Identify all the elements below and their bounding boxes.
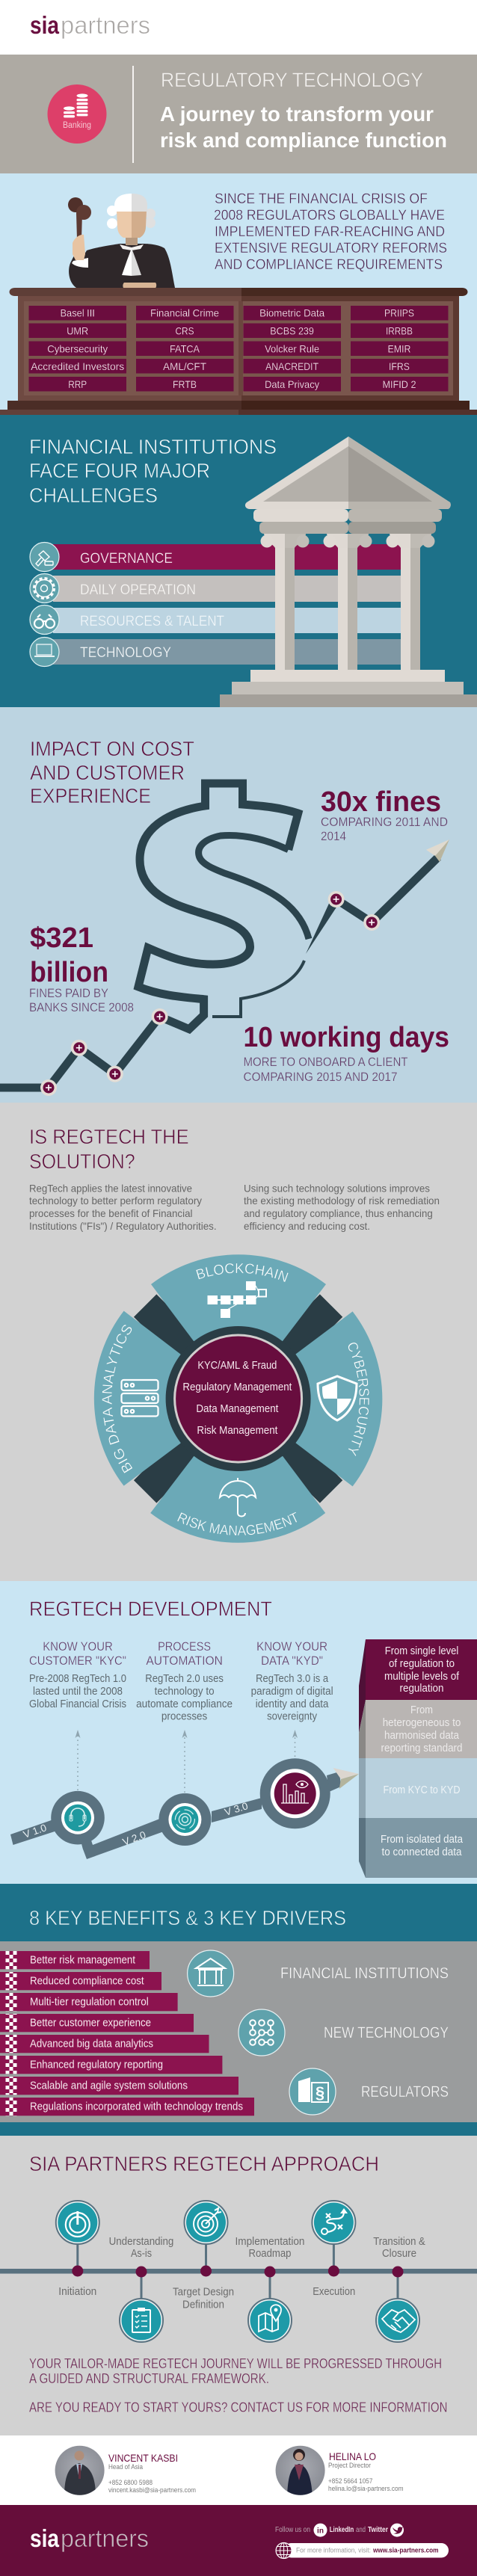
panel: shift stack: [359, 1639, 477, 1878]
chart: regulation table: AML/CFT: [163, 360, 206, 372]
segment: risk management: RISK MANAGEMENT: [177, 1512, 298, 1535]
column: right: [386, 534, 435, 670]
panel: contacts: [55, 2446, 403, 2495]
text block: regulatory reforms: AND COMPLIANCE REQUIREMENTS: [215, 256, 443, 273]
chart: regulation table: Basel III: [60, 306, 95, 318]
bar: resources and talent: RESOURCES & TALENT: [80, 614, 224, 629]
callout: 10 working days: 10 working days: [244, 1022, 449, 1053]
callout: 10 working days: COMPARING 2015 AND 2017: [244, 1070, 398, 1084]
chart: benefit bars: Better risk management: [30, 1954, 136, 1967]
heading: is regtech: SOLUTION?: [29, 1150, 135, 1173]
milestone: v1 headset: [51, 1791, 105, 1845]
text block: wheel centre: KYC/AML & Fraud: [197, 1360, 277, 1372]
heading: regulatory technology: REGULATORY TECHNOLOGY: [161, 69, 423, 91]
step: implementation roadmap: [235, 2235, 305, 2342]
chart: approach timeline: [0, 2201, 477, 2342]
callout: 10 working days: MORE TO ONBOARD A CLIENT: [244, 1055, 408, 1069]
callout: 10 working days: [244, 1022, 449, 1084]
text block: helina lo: HELINA LO: [329, 2450, 376, 2462]
block: regulation levels: multiple levels of: [384, 1670, 460, 1683]
text block: regtech benefits: the existing methodology of risk remediation: [244, 1195, 440, 1207]
chart: regulation table: BCBS 239: [270, 325, 314, 337]
driver: financial institutions: FINANCIAL INSTITUTIONS: [280, 1965, 449, 1982]
text block: know your data: RegTech 3.0 is a: [256, 1672, 329, 1685]
heading: key benefits: 8 KEY BENEFITS & 3 KEY DRIVERS: [29, 1906, 346, 1929]
social links: and: [356, 2526, 366, 2534]
icon: gavel circle: [30, 543, 59, 571]
chart: regulation table: [28, 306, 449, 392]
heading: challenges: FINANCIAL INSTITUTIONS: [29, 435, 277, 458]
footer logo: sia: [30, 2524, 60, 2552]
block: regulation levels: From single level: [385, 1645, 458, 1657]
text block: process automation: PROCESS: [158, 1639, 211, 1654]
panel: header logo: sia: [30, 11, 60, 39]
chart: regulation table: PRIIPS: [384, 306, 414, 318]
driver: regulators: §: [316, 2083, 324, 2102]
segment: blockchain: [151, 1254, 326, 1341]
icon: judge with gavel: [68, 194, 175, 288]
step: initiation: Initiation: [58, 2285, 96, 2298]
bar: daily operation: DAILY OPERATION: [80, 582, 196, 598]
text block: helina lo: +852 5664 1057: [328, 2477, 372, 2486]
icon: binoculars circle: [30, 606, 59, 634]
segment: cybersecurity: [296, 1311, 383, 1486]
chart: regtech wheel: [94, 1254, 383, 1543]
milestone: v2 automation: [159, 1793, 211, 1846]
block: kyc to kyd: From KYC to KYD: [383, 1784, 461, 1796]
text block: wheel centre: Data Management: [196, 1403, 278, 1415]
step: target design definition: Target Design: [173, 2286, 234, 2298]
chart: benefit bars: Enhanced regulatory reporting: [30, 2059, 163, 2071]
text block: regtech benefits: and regulatory compliance, thus enhancing: [244, 1207, 433, 1219]
text block: vincent kasbi: vincent.kasbi@sia-partners.com: [108, 2486, 196, 2495]
text block: know your data: DATA "KYD": [261, 1654, 323, 1668]
heading: is regtech: IS REGTECH THE: [29, 1125, 189, 1148]
callout: 321 billion: FINES PAID BY: [29, 987, 108, 1000]
segment: risk management: [150, 1456, 326, 1543]
social links: Twitter: [368, 2526, 388, 2534]
text block: know your customer: Global Financial Crisis: [29, 1698, 126, 1710]
title: a journey to transform: [160, 102, 447, 152]
step: execution: Execution: [313, 2285, 355, 2298]
text block: regtech definition: processes for the benefit of Financial: [29, 1207, 193, 1219]
icon: temple: [220, 437, 477, 707]
panel: key benefits and drivers: [0, 1884, 477, 2136]
chart: regulation table: IRRBB: [386, 325, 413, 337]
text block: vincent kasbi: [108, 2452, 196, 2495]
bar: governance: [53, 544, 401, 570]
step: target design definition: [173, 2201, 234, 2311]
chart: benefit bars: Scalable and agile system solutions: [30, 2080, 188, 2092]
chart: regulation table: EMIR: [387, 343, 411, 355]
text block: regtech benefits: Using such technology solutions improves: [244, 1183, 430, 1195]
text block: vincent kasbi: Head of Asia: [108, 2463, 144, 2471]
block: connected data: [366, 1818, 477, 1878]
callout: 30x fines: [321, 786, 448, 843]
text block: regulatory reforms: 2008 REGULATORS GLOBALLY HAVE: [214, 207, 445, 224]
step: implementation roadmap: Roadmap: [248, 2247, 292, 2260]
bar: governance: GOVERNANCE: [80, 551, 173, 567]
arrowhead: [333, 1768, 359, 1789]
heading: impact: AND CUSTOMER: [30, 761, 185, 784]
panel: impact on cost: [0, 707, 477, 1103]
chart: version road: [10, 1758, 359, 1859]
text block: regulatory reforms: SINCE THE FINANCIAL CRISIS OF: [215, 191, 428, 207]
text block: call to action: [29, 2356, 447, 2415]
chart: benefit bars: Better customer experience: [30, 2017, 151, 2030]
heading: impact: IMPACT ON COST: [30, 737, 194, 760]
heading: impact: [30, 737, 194, 807]
text block: know your data: KNOW YOUR: [256, 1639, 327, 1654]
heading: challenges: FACE FOUR MAJOR: [29, 459, 210, 482]
text block: wheel centre: [182, 1360, 292, 1437]
chart: benefit bars: Advanced big data analytics: [30, 2038, 153, 2050]
text block: know your customer: [29, 1639, 126, 1710]
title: a journey to transform: A journey to transform your: [160, 102, 434, 126]
callout: 321 billion: $321: [30, 922, 93, 954]
chart: regulation table: Biometric Data: [259, 306, 324, 318]
heading: impact: EXPERIENCE: [30, 784, 151, 807]
text block: know your data: paradigm of digital: [251, 1685, 333, 1698]
step: understanding as-is: [109, 2235, 173, 2342]
text block: know your data: sovereignty: [267, 1710, 318, 1723]
text block: regtech benefits: [244, 1183, 440, 1232]
website pill: [276, 2543, 449, 2558]
website pill: For more information, visit:: [296, 2546, 371, 2555]
text block: regtech benefits: efficiency and reducing cost.: [244, 1220, 370, 1232]
label: v2.0: V 2.0: [121, 1829, 147, 1848]
social links: in: [317, 2527, 324, 2536]
block: connected data: to connected data: [381, 1846, 462, 1858]
panel: four major challenges: [0, 415, 477, 707]
bar: technology: TECHNOLOGY: [80, 645, 171, 661]
block: data reporting: heterogeneous to: [383, 1716, 461, 1729]
callout: 30x fines: COMPARING 2011 AND: [321, 816, 448, 829]
text block: helina lo: [328, 2450, 404, 2493]
label: v3.0: V 3.0: [223, 1800, 249, 1818]
chart: regulation table: ANACREDIT: [265, 360, 318, 372]
chart: regulation table: Data Privacy: [265, 378, 319, 390]
chart: regulation table: CRS: [175, 325, 194, 337]
step: transition and closure: Transition &: [373, 2235, 425, 2248]
driver: regulators: [289, 2068, 449, 2115]
arrows: dotted upward: [75, 1730, 298, 1793]
heading: is regtech: [29, 1125, 189, 1173]
callout: 321 billion: billion: [30, 957, 108, 988]
text block: wheel centre: Regulatory Management: [182, 1381, 292, 1393]
block: regulation levels: [366, 1639, 477, 1700]
step: initiation: [56, 2201, 99, 2298]
panel: header logo: partners: [61, 11, 150, 39]
text block: regtech definition: RegTech applies the latest innovative: [29, 1183, 192, 1195]
panel: title banner: [0, 55, 477, 173]
chart: regulation table: Cybersecurity: [47, 343, 108, 355]
text block: vincent kasbi: +852 6800 5988: [108, 2479, 153, 2487]
text block: know your customer: CUSTOMER "KYC": [29, 1654, 126, 1668]
step: understanding as-is: Understanding: [109, 2235, 173, 2248]
photo: vincent kasbi: [55, 2446, 105, 2495]
text block: call to action: A GUIDED AND STRUCTURAL FRAMEWORK.: [29, 2371, 269, 2386]
social links: [275, 2524, 404, 2537]
heading: challenges: CHALLENGES: [29, 484, 158, 507]
bar: resources and talent: [53, 608, 401, 633]
block: regulation levels: of regulation to: [389, 1657, 455, 1670]
heading: regtech development: REGTECH DEVELOPMENT: [29, 1597, 272, 1621]
text block: process automation: technology to: [155, 1685, 215, 1698]
panel: footer: [0, 2505, 477, 2576]
title: a journey to transform: risk and compliance function: [160, 129, 447, 152]
icon: banking badge: Banking: [63, 121, 91, 130]
text block: regulatory reforms: [214, 191, 447, 273]
text block: helina lo: helina.lo@sia-partners.com: [328, 2485, 404, 2493]
text block: know your customer: Pre-2008 RegTech 1.0: [29, 1672, 126, 1685]
driver: new technology: NEW TECHNOLOGY: [324, 2024, 449, 2042]
panel: is regtech the solution: [0, 1103, 477, 1581]
text block: regtech definition: technology to better perform regulatory: [29, 1195, 202, 1207]
driver: new technology: [238, 2009, 449, 2056]
panel: regtech development: [0, 1581, 477, 1884]
segment: big data analytics: BIG DATA ANALYTICS: [102, 1325, 133, 1473]
text block: process automation: processes: [161, 1710, 207, 1723]
text block: process automation: RegTech 2.0 uses: [145, 1672, 224, 1685]
step: transition and closure: Closure: [382, 2247, 416, 2260]
chart: benefit bars: [0, 1951, 254, 2116]
text block: helina lo: Project Director: [328, 2462, 371, 2470]
chart: regulation table: IFRS: [389, 360, 410, 372]
chart: regulation table: Volcker Rule: [265, 343, 319, 355]
heading: challenges: [29, 435, 277, 507]
bar: daily operation: [53, 576, 401, 602]
block: regulation levels: regulation: [399, 1682, 444, 1695]
arrowhead: [426, 839, 449, 862]
chart: regulation table: FATCA: [170, 343, 200, 355]
chart: benefit bars: Reduced compliance cost: [30, 1975, 144, 1988]
icon: gear circle: [30, 574, 59, 603]
segment: cybersecurity: CYBERSECURITY: [348, 1343, 369, 1456]
chart: benefit bars: Regulations incorporated with technology trends: [30, 2101, 243, 2113]
block: data reporting: harmonised data: [384, 1729, 460, 1742]
text block: wheel centre: Risk Management: [197, 1425, 277, 1437]
text block: regulatory reforms: EXTENSIVE REGULATORY REFORMS: [215, 240, 447, 256]
text block: know your customer: lasted until the 2008: [33, 1685, 123, 1698]
step: execution: [312, 2201, 355, 2298]
panel: regulators: [0, 173, 477, 415]
segment: blockchain: BLOCKCHAIN: [196, 1263, 289, 1282]
column: left: [260, 534, 310, 670]
chart: dollar line graph: [0, 783, 449, 1096]
driver: financial institutions: [188, 1950, 449, 1997]
text block: regtech definition: [29, 1183, 217, 1232]
social links: LinkedIn: [330, 2526, 354, 2534]
text block: regulatory reforms: IMPLEMENTED FAR-REACHING AND: [215, 224, 445, 240]
step: transition and closure: [373, 2235, 425, 2342]
label: v1.0: V 1.0: [22, 1822, 48, 1840]
text block: process automation: automate compliance: [136, 1698, 233, 1710]
panel: header logo: [0, 0, 477, 55]
text block: process automation: [136, 1639, 233, 1723]
chart: regulation table: UMR: [67, 325, 88, 337]
text block: know your customer: KNOW YOUR: [43, 1639, 113, 1654]
driver: regulators: REGULATORS: [361, 2083, 449, 2101]
callout: 321 billion: BANKS SINCE 2008: [29, 1001, 134, 1014]
text block: know your data: [251, 1639, 333, 1723]
text block: know your data: identity and data: [256, 1698, 329, 1710]
heading: approach: SIA PARTNERS REGTECH APPROACH: [29, 2152, 379, 2175]
chart: regulation table: RRP: [68, 378, 87, 390]
footer logo: partners: [61, 2524, 149, 2552]
photo: helina lo: [275, 2446, 325, 2495]
callout: 30x fines: 2014: [321, 830, 346, 843]
panel: judge bench with regulations: [0, 288, 477, 415]
bar: technology: [53, 639, 401, 665]
text block: regtech definition: Institutions ("FIs") / Regulatory Authorities.: [29, 1220, 217, 1232]
step: implementation roadmap: Implementation: [235, 2235, 305, 2248]
chart: regulation table: Accredited Investors: [31, 360, 124, 372]
text block: vincent kasbi: VINCENT KASBI: [108, 2452, 178, 2464]
block: data reporting: reporting standard: [381, 1742, 462, 1754]
block: data reporting: From: [410, 1704, 433, 1716]
icon: banking badge: [48, 84, 106, 144]
block: connected data: From isolated data: [381, 1833, 464, 1846]
panel: approach: [0, 2136, 477, 2435]
chart: regulation table: MIFID 2: [383, 378, 416, 390]
chart: regulation table: Financial Crime: [150, 306, 219, 318]
social links: Follow us on: [275, 2526, 310, 2534]
chart: benefit bars: Multi-tier regulation control: [30, 1996, 149, 2009]
chart: regulation table: FRTB: [173, 378, 197, 390]
column: middle: [323, 534, 372, 670]
block: data reporting: [366, 1700, 477, 1758]
callout: 321 billion: [29, 922, 134, 1014]
step: target design definition: Definition: [182, 2299, 224, 2311]
text block: process automation: AUTOMATION: [146, 1654, 223, 1668]
milestone: v3 data: [260, 1758, 330, 1828]
callout: 30x fines: 30x fines: [321, 786, 441, 818]
website pill: www.sia-partners.com: [372, 2546, 438, 2555]
block: kyc to kyd: [366, 1758, 477, 1818]
icon: laptop circle: [30, 637, 59, 667]
segment: big data analytics: [94, 1311, 181, 1486]
step: understanding as-is: As-is: [131, 2247, 152, 2260]
